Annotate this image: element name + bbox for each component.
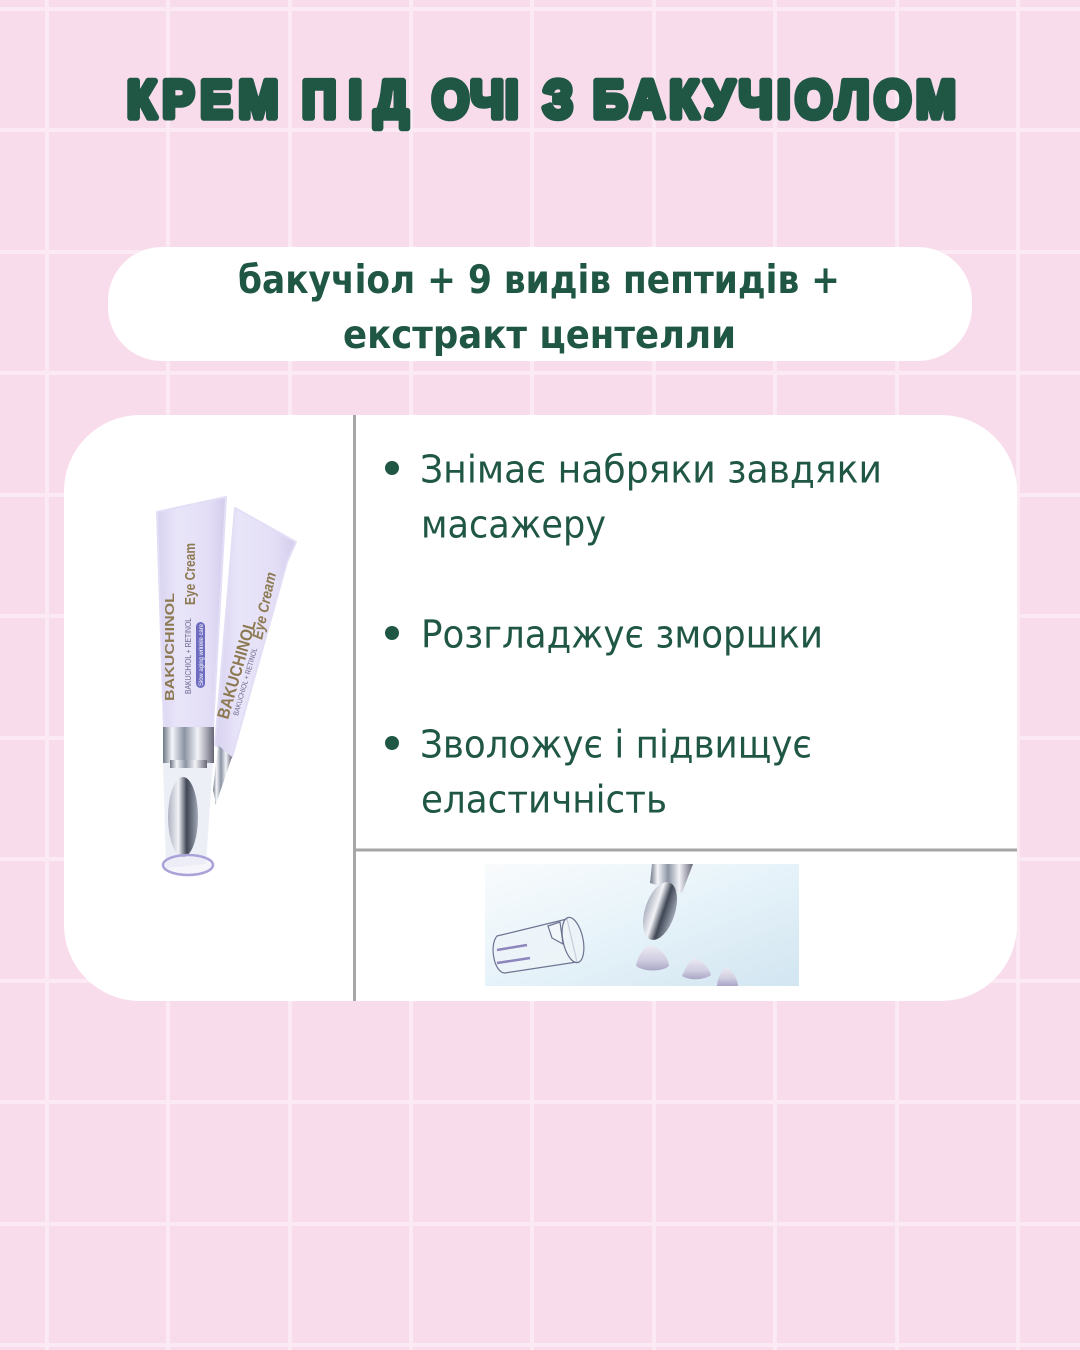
product photo: two eye cream tubes <box>157 497 296 875</box>
benefit: hydration <box>385 722 812 822</box>
benefit: wrinkles: Розгладжує зморшки <box>421 612 823 656</box>
applicator tip <box>643 864 693 940</box>
front tube <box>157 497 226 875</box>
title: ОЧІ <box>432 69 518 129</box>
title: ПІД <box>302 69 408 129</box>
benefit: swelling: масажеру <box>421 502 606 546</box>
benefit: hydration: Зволожує і підвищує <box>420 722 812 766</box>
back tube: Eye Cream <box>249 571 280 641</box>
front tube: Eye Cream <box>182 543 199 605</box>
clear cap <box>493 915 588 973</box>
cream dollops <box>636 945 738 986</box>
benefits list <box>385 448 882 822</box>
benefit: swelling: Знімає набряки завдяки <box>420 448 882 492</box>
title: БАКУЧІОЛОМ <box>593 69 956 129</box>
back tube: BAKUCHINOL <box>214 618 260 721</box>
title: КРЕМ <box>127 69 278 129</box>
ingredients text <box>238 258 840 358</box>
benefit: hydration: еластичність <box>421 778 667 822</box>
front tube: BAKUCHIOL + RETINOL <box>184 618 193 694</box>
back tube: BAKUCHIOL + RETINOL <box>231 647 259 717</box>
panel: product card <box>64 415 1017 1001</box>
benefit: swelling <box>385 448 882 546</box>
ingredients pill <box>108 247 972 361</box>
title: З <box>543 69 573 129</box>
front tube: BAKUCHINOL <box>162 593 177 701</box>
ingredients text: бакучіол + 9 видів пептидів + <box>238 258 840 303</box>
front tube: Slow aging wrinkle care <box>199 623 205 686</box>
title <box>127 69 956 129</box>
back tube <box>213 508 296 805</box>
ingredients text: екстракт центелли <box>343 313 736 358</box>
massager photo <box>485 864 799 986</box>
